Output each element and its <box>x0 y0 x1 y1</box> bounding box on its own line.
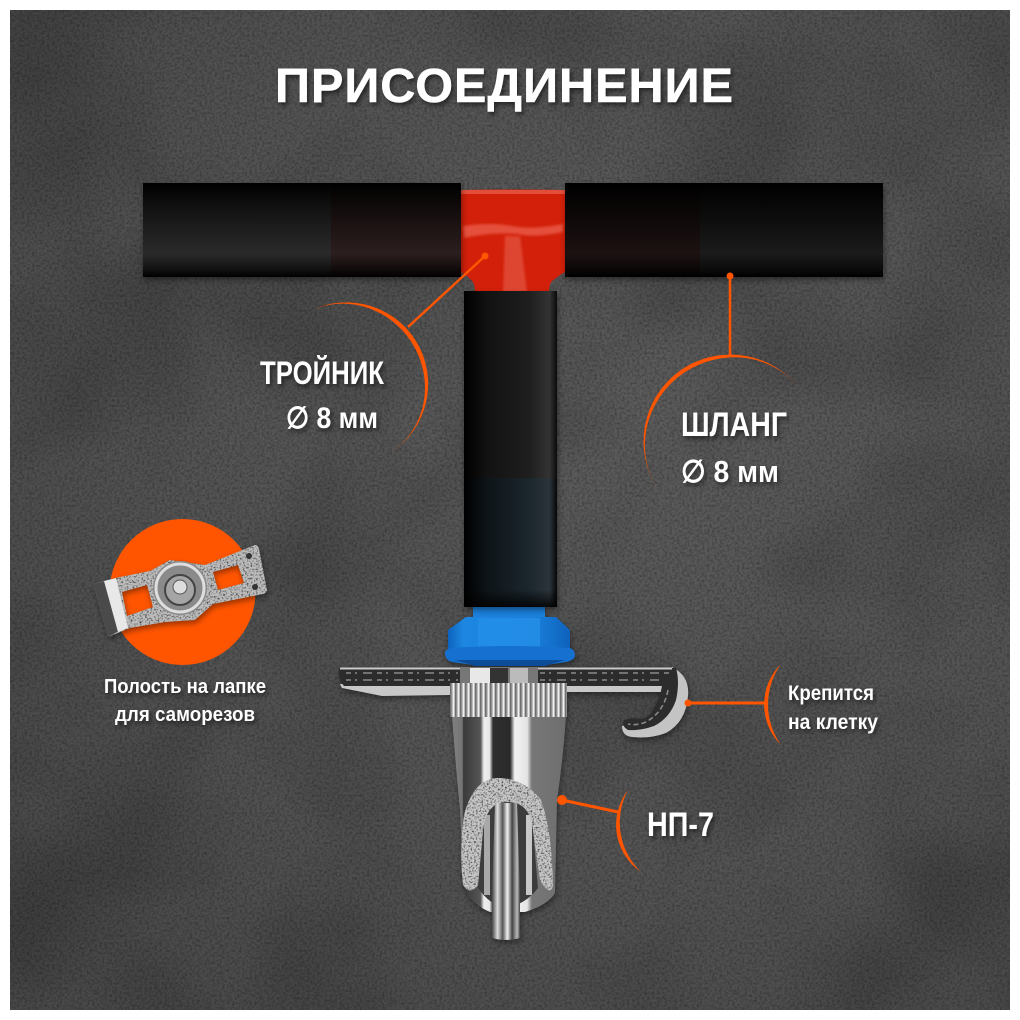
callout: tee <box>260 252 488 453</box>
tee fitting (red) <box>461 190 565 292</box>
collar <box>460 667 538 687</box>
blue hex nut <box>445 606 575 666</box>
hose: vertical <box>464 291 557 607</box>
valve slot with inner strips <box>478 802 538 908</box>
callout: attaches to cage: Крепится <box>788 682 874 705</box>
lower bright lip of plate <box>340 684 665 696</box>
orange circle <box>110 519 256 665</box>
knurled ring <box>450 683 567 717</box>
callout: hose: ∅ 8 мм <box>681 454 779 490</box>
callout: NP-7: НП-7 <box>647 806 714 844</box>
mounting plate with hook <box>339 667 688 738</box>
callout: hose <box>644 272 802 491</box>
title: ПРИСОЕДИНЕНИЕ <box>275 60 734 113</box>
hose: right horizontal <box>565 183 883 277</box>
arch yoke <box>461 778 553 890</box>
nipple drinker NP-7 with blue nut and mounting plate <box>339 606 688 940</box>
caption: cavity on the foot for screws: для саморезов <box>115 704 255 726</box>
callout: tee: ТРОЙНИК <box>260 355 384 391</box>
hook outer rim <box>622 667 688 738</box>
mounting foot inset <box>93 519 267 665</box>
metal foot plate <box>93 545 267 637</box>
callout: tee: ∅ 8 мм <box>286 401 378 436</box>
caption: cavity on the foot for screws <box>104 676 266 726</box>
nipple body <box>452 716 566 912</box>
valve pin <box>492 803 520 940</box>
top surface of plate and hook <box>339 668 678 730</box>
callout: attaches to cage <box>684 664 878 745</box>
hose: left horizontal <box>143 183 461 277</box>
callout: NP-7 <box>557 790 714 872</box>
callout: hose: ШЛАНГ <box>681 406 787 444</box>
light flecks on plate surface <box>346 673 670 725</box>
caption: cavity on the foot for screws: Полость на лапке <box>104 676 266 698</box>
callout: attaches to cage: на клетку <box>788 711 878 734</box>
